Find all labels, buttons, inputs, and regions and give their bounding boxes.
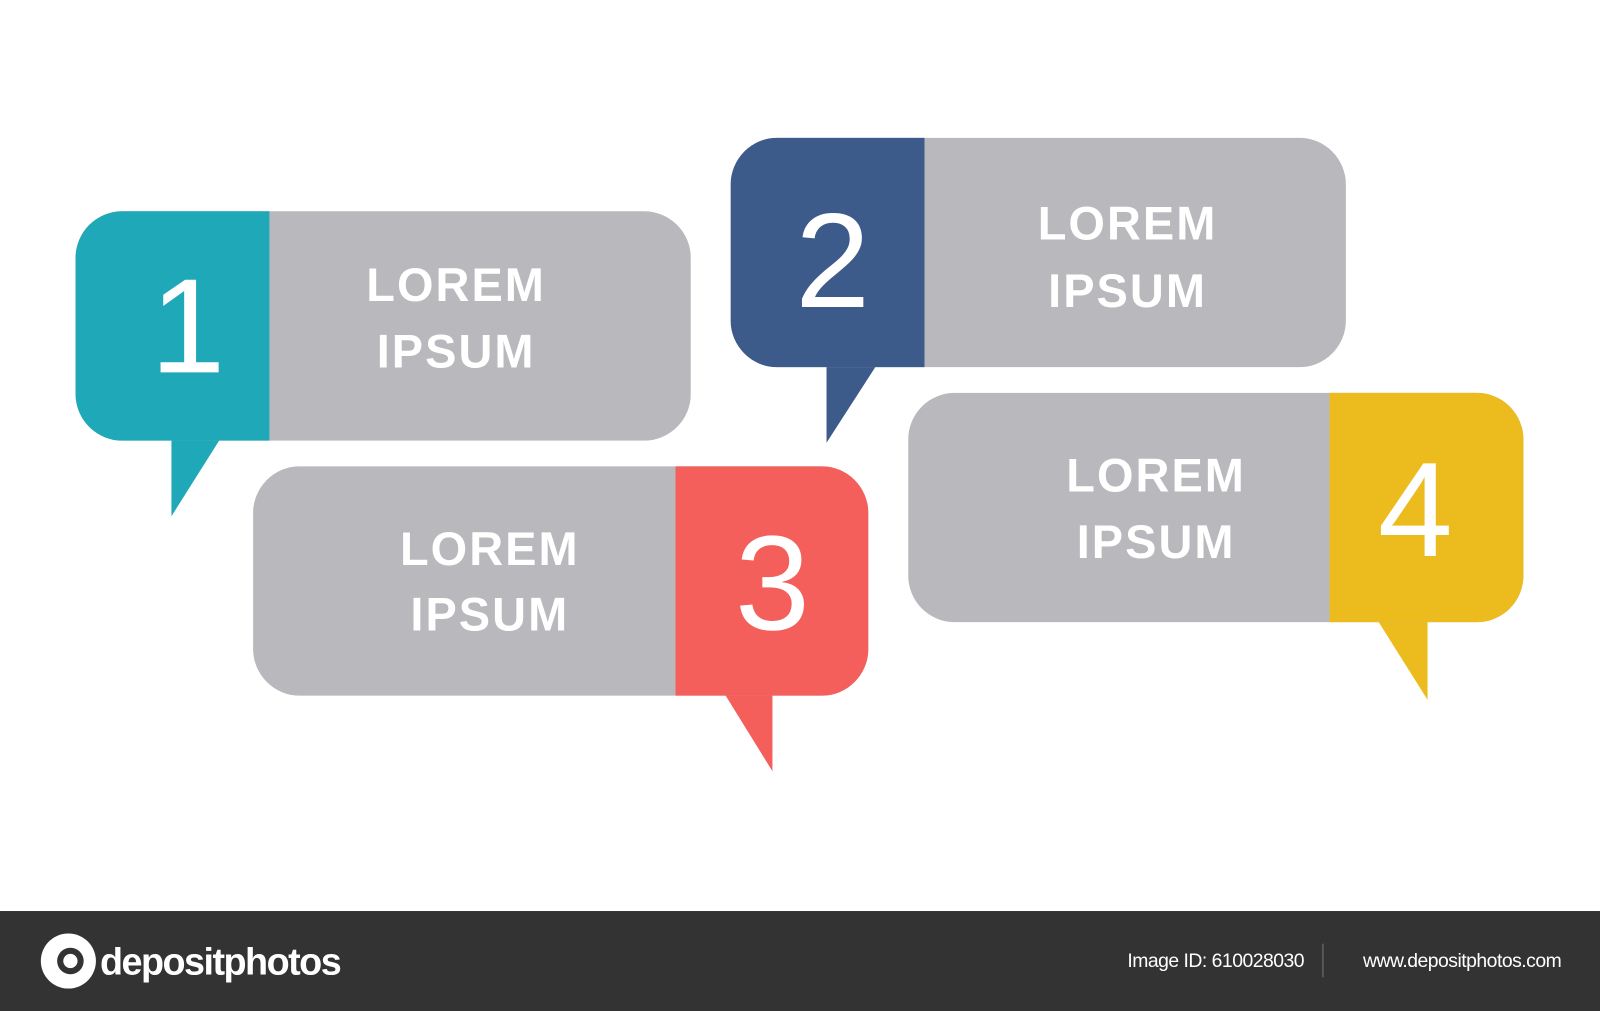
text 3: IPSUM: [410, 588, 569, 640]
text 2: LOREM: [1038, 198, 1217, 250]
bubble 1: [76, 211, 691, 516]
logo text: depositphotos: [100, 940, 341, 982]
image id: Image ID: 610028030: [1127, 950, 1305, 972]
text 2: IPSUM: [1048, 265, 1207, 317]
bubble 4: [908, 393, 1523, 700]
text 4: LOREM: [1066, 450, 1246, 502]
text 4: IPSUM: [1077, 516, 1236, 568]
text 3: LOREM: [400, 523, 580, 575]
text 1: LOREM: [366, 259, 546, 311]
number 3: 3: [735, 507, 810, 658]
footer bar: [0, 911, 1600, 1011]
number 2: 2: [795, 185, 870, 336]
bubble 2: [731, 138, 1346, 443]
url: www.depositphotos.com: [1362, 950, 1561, 972]
number 1: 1: [150, 250, 225, 401]
text 1: IPSUM: [377, 325, 536, 377]
bubble 3: [253, 466, 868, 771]
logo icon: [41, 933, 96, 989]
number 4: 4: [1378, 434, 1453, 585]
